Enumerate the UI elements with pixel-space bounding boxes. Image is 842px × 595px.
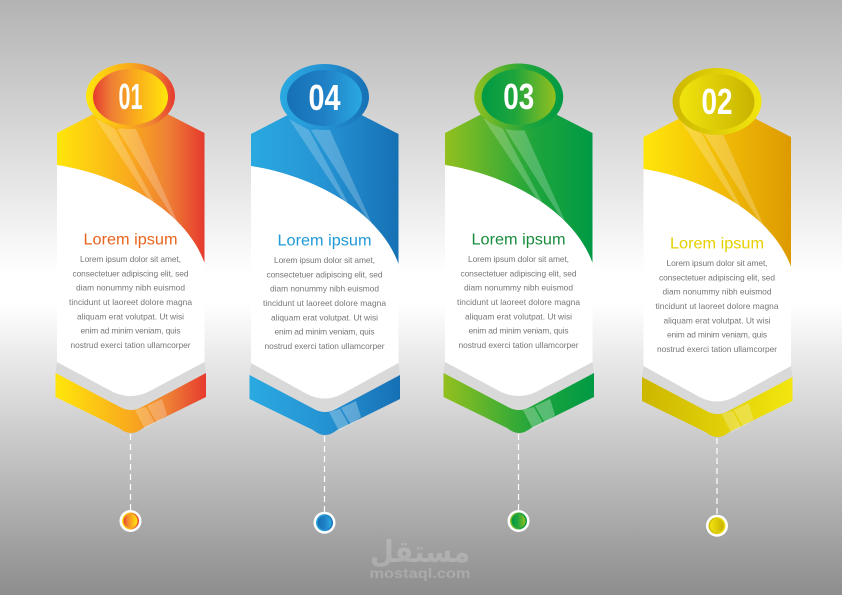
card 04 top band xyxy=(251,96,398,264)
card 02 top band xyxy=(644,99,791,267)
card 02 badge xyxy=(672,68,762,135)
card 01 title: Lorem ipsum xyxy=(84,232,178,248)
card 03 dot xyxy=(508,510,530,532)
card 01 dashed connector xyxy=(130,434,132,510)
card 03 body text xyxy=(457,254,580,350)
card 03 chevron xyxy=(444,373,594,433)
card 03 body text: enim ad minim veniam, quis xyxy=(468,326,568,336)
watermark xyxy=(370,535,470,581)
card 02 body text: nostrud exerci tation ullamcorper xyxy=(657,344,777,354)
card 02 chevron xyxy=(642,377,792,437)
card 01 body text xyxy=(69,254,192,350)
card 02 title: Lorem ipsum xyxy=(670,236,764,252)
card 01 chevron highlights xyxy=(135,399,167,429)
card 02 body text: diam nonummy nibh euismod xyxy=(662,287,772,297)
card 03 number: 03 xyxy=(503,76,534,117)
card 03 body text: tincidunt ut laoreet dolore magna xyxy=(457,297,580,307)
card 03 body text: Lorem ipsum dolor sit amet, xyxy=(468,254,569,264)
card 04 lower shadow xyxy=(250,363,400,414)
card 04 body text xyxy=(263,255,386,351)
card 03 dashed connector xyxy=(518,434,520,510)
card 04 white body xyxy=(251,166,398,398)
card 04 dashed connector xyxy=(324,436,326,512)
watermark arabic wordmark: مستقل xyxy=(370,535,470,570)
card 01 body text: aliquam erat volutpat. Ut wisi xyxy=(77,311,184,321)
card 02 body text: Lorem ipsum dolor sit amet, xyxy=(666,258,768,268)
card 01 body text: diam nonummy nibh euismod xyxy=(76,283,185,293)
card 03 badge xyxy=(474,64,563,130)
card 02 light beams xyxy=(682,122,768,236)
card 04 chevron highlights xyxy=(329,401,361,431)
card 04 light beams xyxy=(289,119,376,233)
card 02 body text xyxy=(656,258,779,354)
card 04 body text: aliquam erat volutpat. Ut wisi xyxy=(271,312,378,322)
card 02 body text: enim ad minim veniam, quis xyxy=(667,330,767,340)
card 04 body text: tincidunt ut laoreet dolore magna xyxy=(263,298,386,308)
card 04 title: Lorem ipsum xyxy=(278,232,372,250)
card 04 body text: consectetuer adipiscing elit, sed xyxy=(266,269,383,279)
card 03 body text: diam nonummy nibh euismod xyxy=(464,283,573,293)
card 03 body text: consectetuer adipiscing elit, sed xyxy=(460,268,577,278)
card 01 body text: tincidunt ut laoreet dolore magna xyxy=(69,297,192,307)
card 01 light beams xyxy=(95,118,182,232)
card 02 dot xyxy=(706,515,728,537)
panel: card 01 xyxy=(56,63,206,532)
card 02 dashed connector xyxy=(716,438,718,514)
card 02 number: 02 xyxy=(702,81,732,122)
card 01 top band xyxy=(57,95,204,263)
card 04 body text: nostrud exerci tation ullamcorper xyxy=(264,341,385,351)
card 03 body text: aliquam erat volutpat. Ut wisi xyxy=(465,311,572,321)
card 03 title: Lorem ipsum xyxy=(472,232,566,248)
card 03 white body xyxy=(445,165,592,396)
card 04 body text: enim ad minim veniam, quis xyxy=(274,327,374,337)
card 01 dot xyxy=(120,510,142,532)
card 01 number: 01 xyxy=(118,76,142,117)
watermark latin wordmark: mostaql.com xyxy=(370,566,470,581)
card 01 badge xyxy=(86,63,175,129)
panel: card 03 xyxy=(444,64,594,532)
card 04 badge xyxy=(280,64,369,130)
card 01 body text: nostrud exerci tation ullamcorper xyxy=(70,340,191,350)
card 01 chevron xyxy=(56,373,206,433)
card 01 body text: Lorem ipsum dolor sit amet, xyxy=(80,254,181,264)
card 01 body text: consectetuer adipiscing elit, sed xyxy=(72,268,189,278)
panel: card 02 xyxy=(642,68,792,537)
card 04 number: 04 xyxy=(308,77,340,118)
card 04 body text: diam nonummy nibh euismod xyxy=(270,284,379,294)
card 03 chevron highlights xyxy=(523,399,555,429)
card 02 chevron highlights xyxy=(722,403,754,433)
card 02 white body xyxy=(644,169,791,402)
card 03 top band xyxy=(445,95,592,263)
card 02 body text: tincidunt ut laoreet dolore magna xyxy=(656,301,779,311)
card 04 chevron xyxy=(250,375,400,435)
card 02 lower shadow xyxy=(642,366,792,416)
card 01 white body xyxy=(57,165,204,396)
card 03 lower shadow xyxy=(444,362,594,412)
card 01 lower shadow xyxy=(56,362,206,412)
card 03 body text: nostrud exerci tation ullamcorper xyxy=(458,340,579,350)
card 04 dot xyxy=(314,512,336,534)
card 02 body text: aliquam erat volutpat. Ut wisi xyxy=(664,315,771,325)
card 03 light beams xyxy=(483,118,570,232)
card 02 body text: consectetuer adipiscing elit, sed xyxy=(659,272,775,282)
panel: card 04 xyxy=(250,64,400,534)
card 01 body text: enim ad minim veniam, quis xyxy=(80,326,180,336)
card 04 body text: Lorem ipsum dolor sit amet, xyxy=(274,255,375,265)
